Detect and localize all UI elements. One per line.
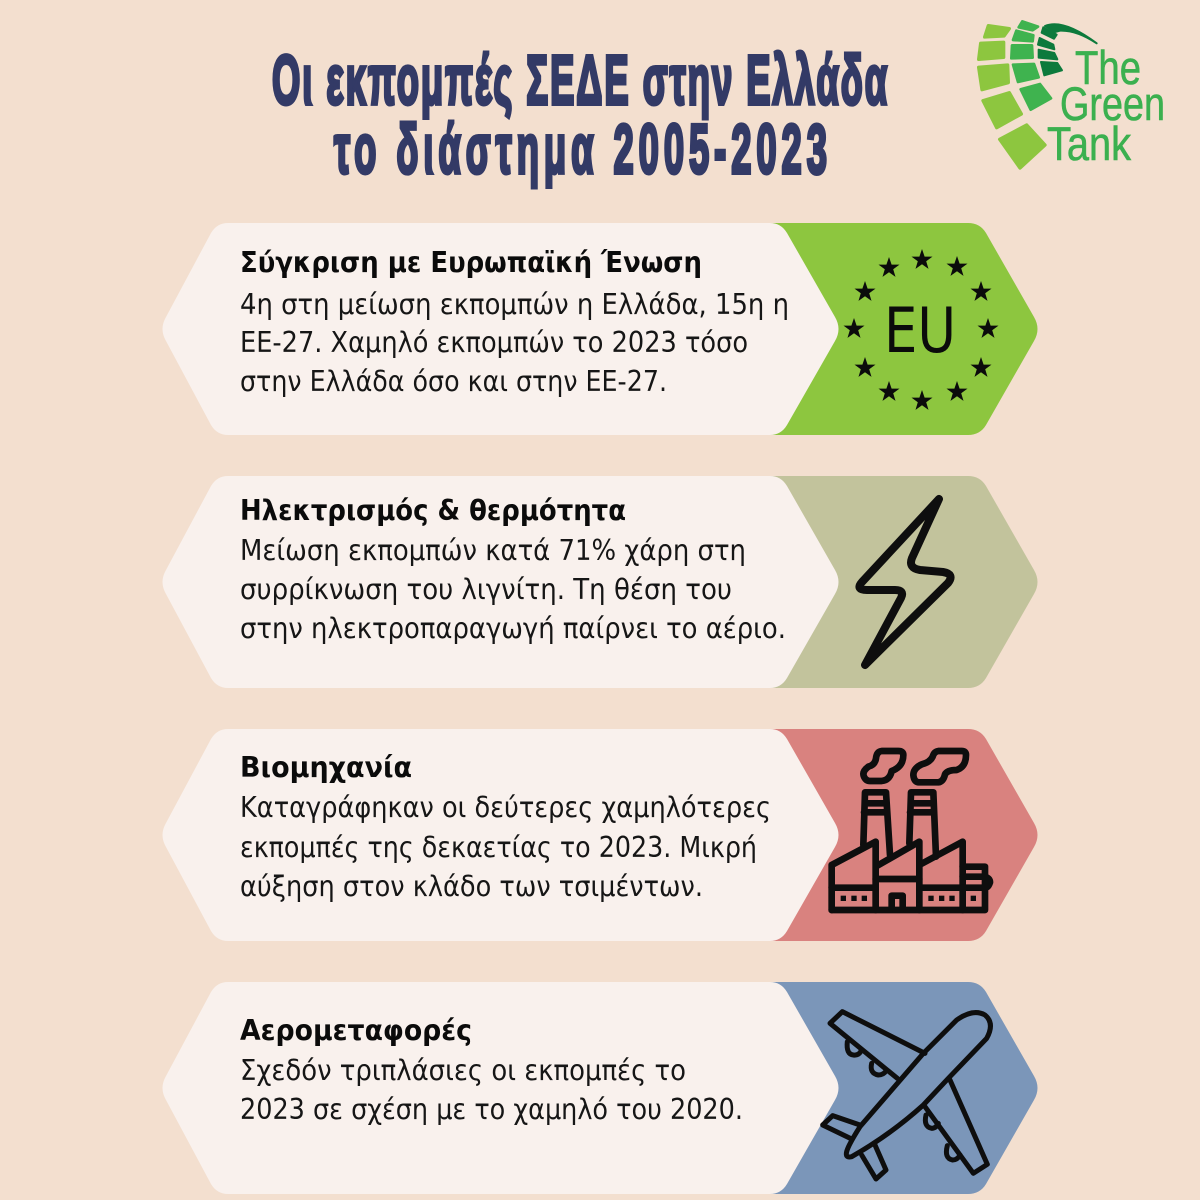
text block: στην Ελλάδα όσο και στην ΕΕ-27. <box>240 365 667 398</box>
panel: aviation <box>162 982 1038 1194</box>
text block: Καταγράφηκαν οι δεύτερες χαμηλότερες <box>240 791 771 824</box>
icon: lightning bolt <box>859 499 951 665</box>
logo: The Green Tank <box>979 21 1165 170</box>
text block <box>240 1054 743 1126</box>
text block <box>240 288 789 398</box>
arrow: green background <box>700 223 1038 435</box>
text block: συρρίκνωση του λιγνίτη. Τη θέση του <box>240 573 732 606</box>
text block: 4η στη μείωση εκπομπών η Ελλάδα, 15η η <box>240 288 789 321</box>
arrow: blue background <box>700 982 1038 1194</box>
panel: electricity and heat <box>162 476 1038 688</box>
heading: Σύγκριση με Ευρωπαϊκή Ένωση <box>240 246 702 279</box>
text block: 2023 σε σχέση με το χαμηλό του 2020. <box>240 1093 743 1126</box>
icon: EU stars <box>844 249 998 410</box>
heading: Αερομεταφορές <box>240 1014 472 1047</box>
card: white arrow <box>162 476 838 688</box>
title <box>272 41 887 188</box>
logo: The Green Tank: Tank <box>1047 117 1131 170</box>
text block: στην ηλεκτροπαραγωγή παίρνει το αέριο. <box>240 612 786 645</box>
heading: Ηλεκτρισμός & θερμότητα <box>240 494 626 527</box>
arrow: red background <box>700 729 1038 941</box>
text block: Σχεδόν τριπλάσιες οι εκπομπές το <box>240 1054 686 1087</box>
logo: The Green Tank: The <box>1075 41 1141 94</box>
text block <box>240 534 786 645</box>
text block: Μείωση εκπομπών κατά 71% χάρη στη <box>240 534 746 567</box>
title: Οι εκπομπές ΣΕΔΕ στην Ελλάδα <box>272 41 887 119</box>
heading: Βιομηχανία <box>240 751 412 784</box>
panel: EU comparison <box>162 223 1038 435</box>
title: το διάστημα 2005-2023 <box>334 110 827 188</box>
card: white arrow <box>162 223 838 435</box>
card: white arrow <box>162 982 838 1194</box>
text block: εκπομπές της δεκαετίας το 2023. Μικρή <box>240 831 757 864</box>
icon: EU stars: EU <box>884 294 956 367</box>
arrow: olive background <box>700 476 1038 688</box>
text block: αύξηση στον κλάδο των τσιμέντων. <box>240 870 703 903</box>
icon: factory <box>832 751 990 910</box>
card: white arrow <box>162 729 838 941</box>
text block: ΕΕ-27. Χαμηλό εκπομπών το 2023 τόσο <box>240 326 748 359</box>
text block <box>240 791 771 903</box>
panel: industry <box>162 729 1038 941</box>
logo: The Green Tank: Green <box>1060 77 1165 130</box>
icon: airplane <box>823 1012 990 1179</box>
